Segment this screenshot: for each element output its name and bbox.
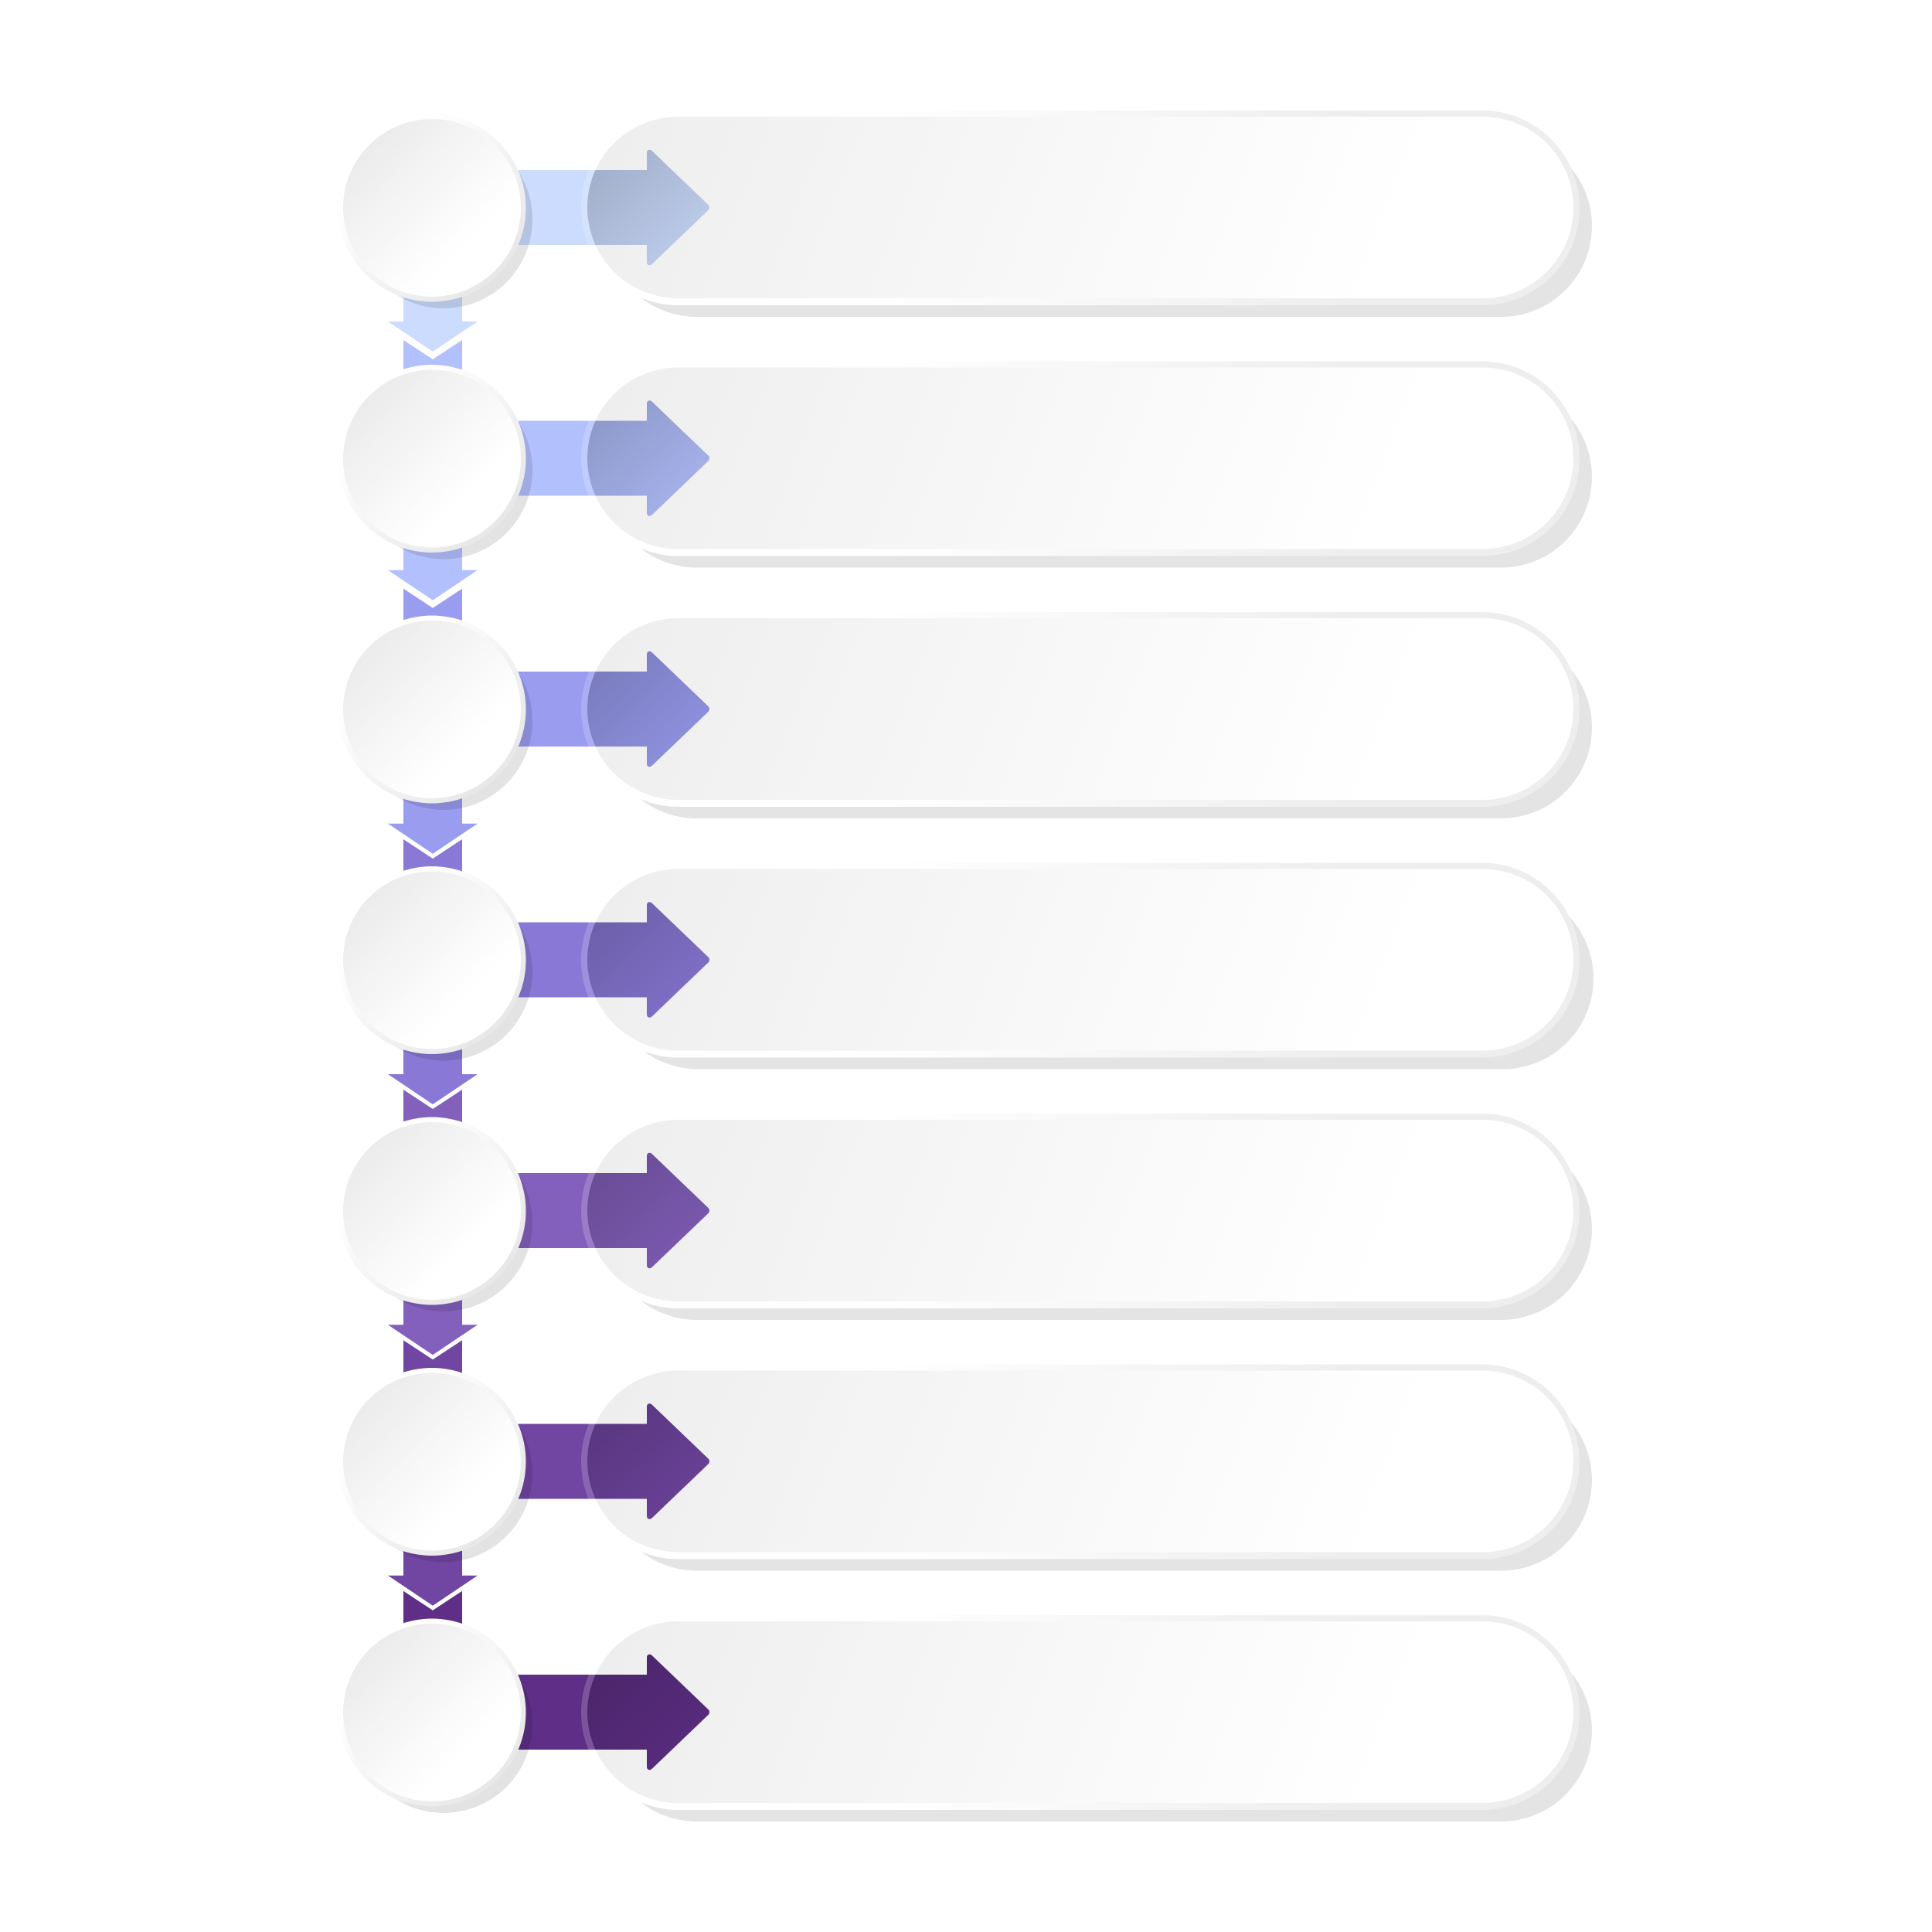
circle badge — [343, 1624, 521, 1801]
panel shadow — [606, 135, 1592, 317]
panel rim — [581, 1114, 1580, 1308]
panel shadow — [606, 1640, 1592, 1821]
connector arrow 5 — [388, 1090, 478, 1355]
circle badge — [343, 1372, 521, 1550]
circle badge — [343, 872, 521, 1049]
arrow: step pointer — [518, 651, 709, 767]
text panel — [587, 1621, 1573, 1803]
circle rim — [338, 114, 526, 301]
step row 6 — [338, 1365, 1592, 1570]
text panel — [587, 618, 1573, 800]
circle rim — [338, 1117, 526, 1304]
panel rim — [581, 1615, 1580, 1810]
step row 4 — [338, 862, 1594, 1070]
circle rim — [338, 1368, 526, 1556]
circle rim — [338, 365, 526, 553]
step row 5 — [338, 1114, 1592, 1320]
circle badge — [343, 1122, 521, 1300]
text panel — [587, 117, 1573, 298]
step row 7 — [338, 1615, 1592, 1821]
text panel — [587, 869, 1573, 1051]
arrow: step pointer — [518, 1403, 709, 1519]
connector arrow 2 — [388, 340, 478, 600]
circle shadow — [355, 1134, 532, 1311]
panel rim — [581, 1365, 1580, 1560]
connector arrow 1 — [388, 207, 478, 352]
circle shadow — [355, 131, 532, 308]
panel shadow — [607, 887, 1594, 1070]
step row 3 — [338, 612, 1592, 818]
panel rim — [581, 111, 1580, 305]
arrow: step pointer — [518, 1654, 709, 1770]
circle badge — [343, 369, 521, 547]
arrow: step pointer — [518, 400, 709, 516]
connector arrow 3 — [388, 589, 478, 854]
panel rim — [581, 612, 1580, 807]
connector tail 7 — [403, 1591, 462, 1712]
arrow: step pointer — [518, 1153, 709, 1269]
connector arrow 6 — [388, 1340, 478, 1606]
vertical connector arrows — [388, 207, 478, 1712]
circle shadow — [355, 1635, 532, 1813]
panel shadow — [606, 1138, 1592, 1320]
circle shadow — [355, 382, 532, 560]
panel shadow — [606, 1389, 1592, 1570]
circle rim — [338, 1618, 526, 1807]
circle shadow — [355, 632, 532, 810]
connector arrow 4 — [388, 839, 478, 1104]
circle badge — [343, 621, 521, 798]
circle shadow — [355, 883, 532, 1060]
panel rim — [581, 862, 1580, 1057]
panel rim — [581, 362, 1580, 556]
panel shadow — [606, 386, 1592, 567]
arrow: step pointer — [518, 150, 709, 266]
text panel — [587, 368, 1573, 549]
text panel — [587, 1120, 1573, 1301]
step row 2 — [338, 362, 1592, 567]
arrow: step pointer — [518, 902, 709, 1018]
text panel — [587, 1371, 1573, 1552]
circle shadow — [355, 1385, 532, 1563]
step row 1 — [338, 111, 1592, 317]
circle rim — [338, 615, 526, 804]
circle rim — [338, 866, 526, 1054]
panel shadow — [606, 637, 1592, 818]
circle badge — [343, 119, 521, 297]
